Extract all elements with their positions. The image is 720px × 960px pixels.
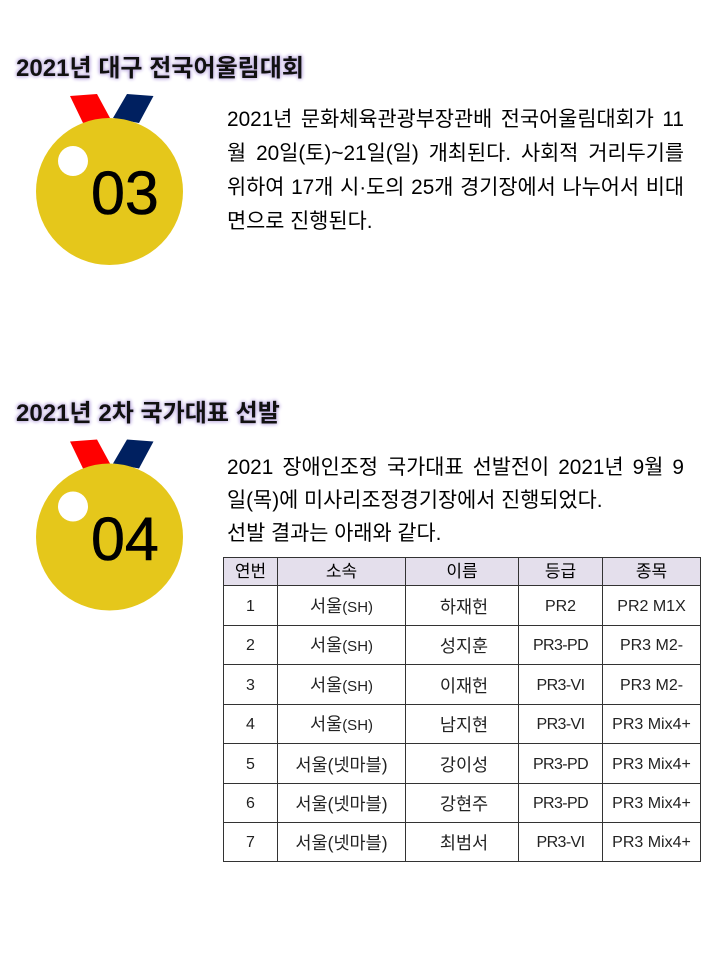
text block: selection description: 일(목)에 미사리조정경기장에서 진행되었다. [227, 489, 603, 512]
table: selection results: 성지훈 [440, 636, 488, 656]
table: selection results: 최범서 [440, 833, 488, 853]
table: selection results: PR3 M2- [620, 676, 683, 694]
table: selection results: 강현주 [440, 794, 488, 814]
heading: 2021 second national team selection: 2021년 2차 국가대표 선발 [16, 400, 280, 427]
table: selection results: PR3-VI [536, 716, 584, 733]
text block: tournament description: 위하여 17개 시·도의 25개 경기장에서 나누어서 비대 [227, 176, 684, 199]
heading: 2021 Daegu national tournament: 2021년 대구 전국어울림대회 [16, 55, 304, 82]
table: selection results: PR3 Mix4+ [612, 834, 691, 851]
table: selection results: 등급 [545, 562, 576, 581]
text block: tournament description [227, 108, 684, 233]
text block: selection description: 선발 결과는 아래와 같다. [227, 522, 441, 545]
table: selection results: 2 [246, 637, 255, 654]
icon: medal 04: 04 [91, 505, 159, 573]
table: selection results: PR3 Mix4+ [612, 795, 691, 812]
text block: selection description [227, 456, 684, 545]
table: selection results: 3 [246, 676, 255, 694]
table: selection results: 남지현 [440, 715, 488, 735]
icon: medal 04 [36, 440, 183, 610]
text block: selection description: 2021 장애인조정 국가대표 선발전이 2021년 9월 9 [227, 456, 684, 479]
table: selection results: PR3-VI [536, 834, 584, 851]
table: selection results: 연번 [235, 562, 266, 581]
table: selection results: 하재헌 [440, 596, 488, 616]
table: selection results: 서울(SH) [310, 635, 373, 655]
text block: tournament description: 월 20일(토)~21일(일) 개최된다. 사회적 거리두기를 [227, 142, 684, 165]
table: selection results: PR3 Mix4+ [612, 716, 691, 733]
table: selection results: 서울(넷마블) [295, 794, 388, 814]
text block: tournament description: 면으로 진행된다. [227, 210, 372, 233]
table: selection results: PR3-VI [536, 676, 584, 694]
icon: medal 03: 03 [91, 159, 159, 227]
table: selection results: 서울(넷마블) [295, 754, 388, 774]
table: selection results: 6 [246, 795, 255, 812]
table: selection results: 종목 [636, 562, 667, 581]
table: selection results: 서울(SH) [310, 596, 373, 616]
table: selection results: 7 [246, 834, 255, 851]
table: selection results: 1 [246, 598, 255, 614]
table: selection results: PR3-PD [533, 637, 588, 654]
table: selection results: PR3 Mix4+ [612, 756, 691, 772]
table: selection results: PR2 [545, 598, 576, 614]
table: selection results: PR3 M2- [620, 637, 683, 654]
icon: medal 03 [36, 94, 183, 265]
table: selection results: PR2 M1X [617, 598, 686, 614]
text block: tournament description: 2021년 문화체육관광부장관배 전국어울림대회가 11 [227, 108, 684, 131]
table: selection results: 소속 [326, 562, 357, 581]
table: selection results: 4 [246, 716, 255, 733]
table: selection results: 이름 [446, 562, 478, 581]
table: selection results: 강이성 [440, 754, 488, 774]
table: selection results [223, 557, 701, 862]
table: selection results: 서울(SH) [310, 674, 373, 694]
table: selection results: 서울(넷마블) [295, 833, 388, 853]
table: selection results: 5 [246, 756, 255, 772]
table: selection results: PR3-PD [533, 756, 588, 772]
table: selection results: PR3-PD [533, 795, 588, 812]
table: selection results: 서울(SH) [310, 714, 373, 734]
table: selection results: 이재헌 [440, 676, 488, 696]
